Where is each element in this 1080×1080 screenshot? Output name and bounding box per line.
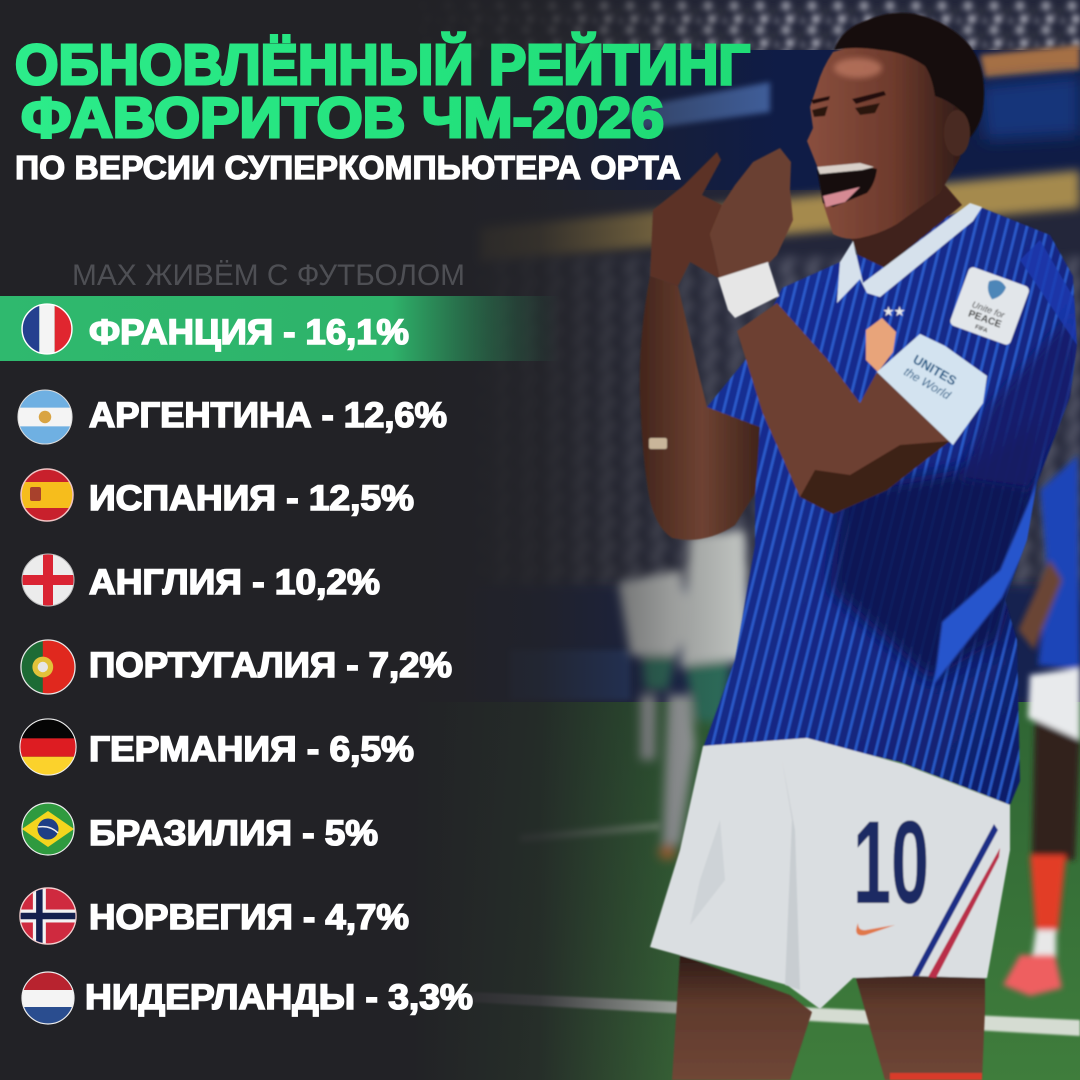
row: France: ФРАНЦИЯ - 16,1% [89, 313, 409, 352]
row: Portugal [21, 640, 452, 694]
sleeve patch: Unite for [971, 299, 1007, 321]
row: Germany: ГЕРМАНИЯ - 6,5% [89, 730, 414, 769]
flag: France [22, 304, 72, 354]
jersey [690, 200, 1080, 810]
title: ОБНОВЛЁННЫЙ РЕЙТИНГ [15, 32, 750, 97]
near arm [737, 303, 950, 514]
ear [944, 110, 970, 156]
row: Netherlands [22, 972, 473, 1024]
flag: Germany [20, 719, 76, 775]
rooster crest [866, 318, 896, 372]
shorts number 10: 10 [853, 797, 929, 929]
row: Norway: НОРВЕГИЯ - 4,7% [89, 898, 409, 937]
row: Spain: ИСПАНИЯ - 12,5% [89, 479, 414, 518]
head and face [807, 13, 984, 239]
row: Argentina [18, 390, 447, 444]
row: Brazil [22, 803, 378, 855]
sleeve patch: FIFA [974, 324, 989, 335]
flag: Netherlands [22, 972, 74, 1024]
flag: Spain [21, 469, 73, 521]
flag: England [22, 554, 74, 606]
two stars: ★★ [883, 306, 905, 318]
flag: Argentina [18, 390, 72, 444]
row: Argentina: АРГЕНТИНА - 12,6% [89, 396, 447, 435]
row: Brazil: БРАЗИЛИЯ - 5% [89, 814, 378, 853]
row: Germany [20, 719, 414, 775]
shorts [650, 738, 1010, 1009]
captain armband: UNITES [910, 352, 960, 389]
title [15, 32, 750, 150]
row: Portugal: ПОРТУГАЛИЯ - 7,2% [89, 646, 452, 685]
watermark: MAX ЖИВЁМ С ФУТБОЛОМ [72, 259, 465, 292]
hair [834, 13, 984, 142]
arm: far forearm and elbow [640, 276, 765, 540]
highlight bar: France [0, 296, 560, 361]
neck [845, 185, 962, 268]
row: France [22, 304, 409, 354]
row: England: АНГЛИЯ - 10,2% [89, 563, 380, 602]
title: ФАВОРИТОВ ЧМ-2026 [21, 86, 664, 150]
shorts swoosh [856, 923, 895, 936]
forehead highlight [834, 58, 882, 78]
flag: Portugal [21, 640, 75, 694]
flag: Norway [20, 888, 76, 944]
background player right [1003, 455, 1080, 996]
shorts side stripes [912, 824, 998, 976]
main player [640, 13, 1080, 1080]
eyes and brows [812, 103, 880, 117]
row: England [22, 554, 380, 606]
collar [837, 203, 982, 303]
mouth [817, 165, 877, 207]
red sock [890, 1073, 982, 1080]
legs [672, 955, 985, 1080]
tape on elbow [649, 438, 667, 449]
flag: Brazil [22, 803, 74, 855]
captain armband: the World [902, 364, 953, 402]
row: Norway [20, 888, 409, 944]
sleeve patch [949, 266, 1030, 346]
row: Spain [21, 469, 414, 521]
far hand [650, 152, 722, 286]
subtitle: ПО ВЕРСИИ СУПЕРКОМПЬЮТЕРА ОРТА [15, 149, 681, 186]
near hand [710, 148, 793, 279]
row: Netherlands: НИДЕРЛАНДЫ - 3,3% [85, 978, 473, 1017]
captain armband [877, 334, 987, 445]
background players [618, 530, 750, 860]
sleeve patch: PEACE [967, 309, 1003, 331]
wristband [718, 262, 779, 318]
